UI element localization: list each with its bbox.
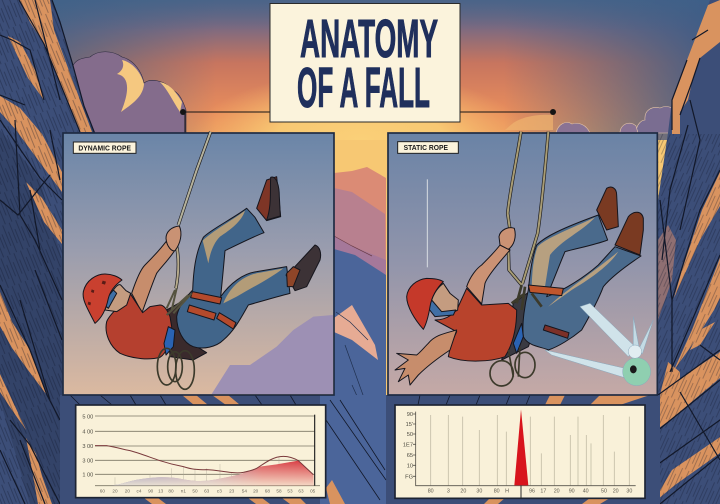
raised arm xyxy=(132,242,175,313)
x axis labels: 20 xyxy=(554,488,560,494)
x axis labels: 13 xyxy=(158,488,164,493)
area under force curve xyxy=(110,461,313,485)
x axis labels: 50 xyxy=(192,488,198,493)
chin strap xyxy=(428,300,456,317)
right cliff xyxy=(620,0,720,504)
x axis labels: H xyxy=(505,488,509,494)
rocks below panels xyxy=(60,395,660,504)
x axis labels: 40 xyxy=(583,488,589,494)
x axis labels: 58 xyxy=(276,488,282,493)
x axis labels: 54 xyxy=(242,488,247,493)
x axis labels: 30 xyxy=(626,488,632,494)
rope coil xyxy=(490,347,535,386)
x axis labels: n1 xyxy=(181,488,186,493)
x axis labels: 63 xyxy=(298,488,304,493)
hand xyxy=(499,228,515,249)
y axis labels: 10 xyxy=(407,463,413,469)
x axis labels: c3 xyxy=(217,488,222,493)
spike marker line xyxy=(519,485,522,498)
x axis labels: 60 xyxy=(100,488,105,493)
x axis labels: c4 xyxy=(137,488,142,493)
trousers xyxy=(177,208,290,348)
climber on dynamic rope xyxy=(83,132,321,389)
upper rope xyxy=(176,132,211,288)
y axis labels: 1 00 xyxy=(82,472,93,478)
hand xyxy=(166,226,181,251)
x axis labels: 17 xyxy=(540,488,546,494)
x axis labels: 20 xyxy=(253,488,259,493)
helmet xyxy=(83,274,122,323)
shoes xyxy=(597,187,618,230)
x axis labels: 80 xyxy=(168,488,174,493)
y axis labels: 15' xyxy=(406,422,413,428)
force curve line xyxy=(95,446,313,475)
y axis labels: 5 00 xyxy=(82,414,93,420)
title: ANATOMY xyxy=(300,9,438,69)
vertical guide lines xyxy=(115,457,290,486)
face xyxy=(430,283,458,315)
x axis labels xyxy=(428,488,632,494)
x axis labels: 63 xyxy=(204,488,210,493)
face xyxy=(105,285,131,312)
y axis labels: 4 00 xyxy=(82,429,93,435)
x axis labels: 96 xyxy=(529,488,535,494)
chart: dynamic rope force curve xyxy=(76,405,326,498)
mountain inside panel xyxy=(212,315,333,394)
static ropes xyxy=(508,132,548,285)
harness core xyxy=(502,290,542,360)
x axis labels: 20 xyxy=(613,488,619,494)
x axis labels: 30 xyxy=(476,488,482,494)
x axis labels: 3 xyxy=(447,488,450,494)
y axis labels xyxy=(403,412,413,480)
raised arm xyxy=(467,245,510,304)
x axis labels: 80 xyxy=(494,488,500,494)
helmet vents xyxy=(88,281,106,305)
x axis labels: 53 xyxy=(287,488,293,493)
fall distance line xyxy=(426,179,429,267)
x axis labels: 80 xyxy=(428,488,434,494)
x axis labels: 90 xyxy=(569,488,575,494)
leg strap xyxy=(543,325,569,338)
panel: static rope xyxy=(388,132,657,395)
label: static rope xyxy=(398,142,458,153)
vertical guide lines xyxy=(431,415,629,485)
blue gear xyxy=(164,327,175,355)
shoe one xyxy=(257,177,281,221)
y axis labels: 3 00 xyxy=(82,444,93,450)
title: OF A FALL xyxy=(297,56,430,120)
right clouds xyxy=(505,106,672,133)
right axis line xyxy=(313,415,316,486)
y axis labels: 3 00 xyxy=(82,458,93,464)
impact shards and green ball xyxy=(545,303,653,386)
trousers xyxy=(523,215,641,350)
x axis labels: 20 xyxy=(460,488,466,494)
climber on static rope xyxy=(395,132,643,386)
label: static rope: STATIC ROPE xyxy=(404,143,448,152)
y axis labels: 90 xyxy=(407,412,413,418)
x axis labels: 20 xyxy=(125,488,130,493)
x axis labels: 20 xyxy=(112,488,118,493)
gridlines and axes xyxy=(95,416,320,486)
y axis labels xyxy=(82,414,93,478)
y axis labels: FG xyxy=(405,474,413,480)
chart: static rope force spike xyxy=(395,405,645,498)
anchor line left xyxy=(180,109,270,133)
label: dynamic rope: DYNAMIC ROPE xyxy=(78,143,131,152)
distant mountains xyxy=(326,167,395,504)
waist band xyxy=(528,285,563,296)
harness bands xyxy=(187,292,236,329)
x axis labels: 50 xyxy=(601,488,607,494)
helmet xyxy=(407,278,443,329)
y axis labels: 65 xyxy=(407,453,413,459)
strap xyxy=(103,290,117,308)
blue gear xyxy=(513,323,523,353)
left cliff xyxy=(0,0,100,504)
x axis labels: 23 xyxy=(229,488,235,493)
title xyxy=(270,4,460,122)
x axis labels xyxy=(100,488,316,493)
anchor line right xyxy=(460,109,556,115)
shoe two xyxy=(286,245,321,291)
shirt xyxy=(106,293,172,359)
y axis labels: 1E7 xyxy=(403,442,413,448)
trouser highlights xyxy=(532,217,618,307)
panel: dynamic rope xyxy=(63,132,334,395)
red force spike xyxy=(514,409,528,485)
harness core xyxy=(167,295,207,360)
axes xyxy=(413,412,636,486)
left clouds xyxy=(72,52,186,140)
rope tangle xyxy=(167,288,192,315)
x axis labels: 68 xyxy=(265,488,270,493)
x axis labels: 05 xyxy=(310,488,316,493)
y axis labels: 50 xyxy=(407,432,413,438)
outstretched arm xyxy=(395,330,457,385)
rope tangle xyxy=(512,285,542,310)
x axis labels: 90 xyxy=(148,488,154,493)
trouser highlights xyxy=(203,211,283,303)
shirt xyxy=(435,288,517,361)
rope coil xyxy=(157,348,194,389)
